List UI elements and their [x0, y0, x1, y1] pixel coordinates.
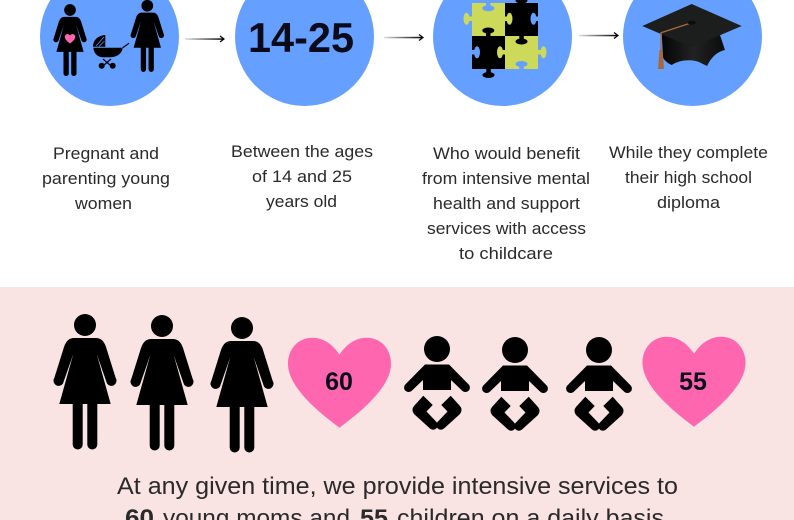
- black downward tab: [516, 36, 528, 44]
- step 3 caption: health and support: [433, 195, 580, 213]
- step 2 circle: ages: [235, 0, 374, 106]
- panel: daily service numbers: [0, 287, 794, 520]
- heart: 55 children: [642, 337, 746, 427]
- step 3 caption: from intensive mental: [422, 170, 590, 188]
- step 1 caption: parenting young: [42, 170, 170, 188]
- arrow 3: [579, 32, 618, 38]
- yellow right tab: [538, 46, 546, 58]
- step 2 caption: [231, 143, 373, 211]
- blue bottom notch: [516, 61, 528, 70]
- panel: eligibility steps: [40, 0, 768, 263]
- step 4 caption: [609, 144, 768, 212]
- step 1 caption: Pregnant and: [53, 145, 159, 163]
- heart: 60 moms: 60: [325, 368, 353, 396]
- yellow centre-left tab: [497, 46, 506, 58]
- step 1 caption: women: [74, 195, 132, 213]
- step 2 caption: Between the ages: [231, 143, 373, 161]
- step 4 caption: diploma: [657, 194, 721, 212]
- step 1 caption: [42, 145, 170, 213]
- step 2 caption: of 14 and 25: [252, 168, 352, 186]
- summary statement: At any given time, we provide intensive services to: [117, 473, 678, 500]
- step 3 caption: services with access: [427, 220, 586, 238]
- icon: woman 3: [211, 317, 273, 452]
- yellow centre tab: [504, 13, 512, 25]
- arrow 1: [185, 36, 224, 42]
- step 2 circle: ages: 14-25: [248, 14, 354, 61]
- icon: baby 2: [482, 337, 548, 431]
- step 3 caption: [422, 145, 590, 263]
- black upward tab: [482, 28, 494, 36]
- blue left notch: [472, 46, 480, 58]
- step 3 caption: Who would benefit: [433, 145, 580, 163]
- step 4 circle: graduation cap: [623, 0, 762, 106]
- icon: baby 3: [566, 337, 632, 431]
- step 3 caption: to childcare: [459, 245, 553, 263]
- blue right notch: [530, 13, 538, 25]
- step 4 caption: their high school: [625, 169, 752, 187]
- step 1 circle: mothers and stroller: [40, 0, 179, 106]
- summary statement: [117, 473, 678, 520]
- step 2 caption: years old: [266, 193, 337, 211]
- arrow 2: [384, 34, 423, 40]
- icon: woman 1: [54, 314, 116, 450]
- black top tab: [516, 0, 528, 4]
- icon: woman 2: [131, 315, 193, 450]
- heart: 55 children: 55: [679, 368, 707, 396]
- yellow left tab: [464, 13, 473, 25]
- step 4 caption: While they complete: [609, 144, 768, 162]
- black bottom tab: [482, 68, 494, 78]
- blue top notch: [482, 3, 494, 11]
- step 3 circle: puzzle: [433, 0, 572, 106]
- heart: 60 moms: [288, 338, 391, 428]
- icon: baby 1: [404, 336, 470, 430]
